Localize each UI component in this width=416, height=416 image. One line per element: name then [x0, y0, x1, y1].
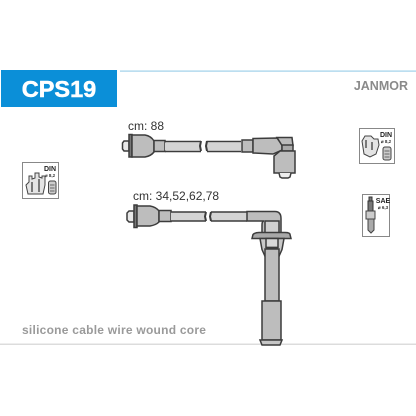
spec text: silicone cable wire wound core — [22, 323, 206, 337]
product code badge: CPS19 — [22, 76, 96, 102]
icon: DIN distributor cap right: ⌀ 8,2 — [381, 139, 392, 144]
length label: cable 1: cm: 88 — [128, 119, 164, 133]
icon: SAE spark plug: SAE — [376, 198, 391, 205]
icon: SAE spark plug — [362, 194, 391, 236]
product code badge — [1, 70, 117, 107]
icon: DIN distributor cap right: DIN — [380, 132, 392, 139]
length label: cable 2: cm: 34,52,62,78 — [133, 189, 219, 203]
icon: DIN distributor cap left: ⌀ 8,2 — [45, 173, 56, 178]
brand name: JANMOR — [354, 79, 408, 93]
icon: DIN distributor cap left: DIN — [44, 166, 56, 173]
cable 1 — [122, 134, 295, 178]
cable 2 — [127, 205, 291, 345]
icon: DIN distributor cap left — [22, 162, 58, 198]
icon: SAE spark plug: ⌀ 6,3 — [378, 205, 389, 210]
icon: DIN distributor cap right — [360, 128, 394, 164]
